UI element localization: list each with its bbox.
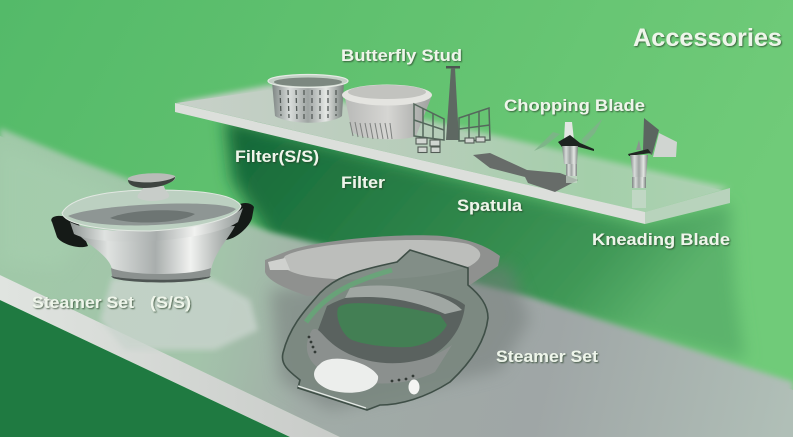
steamer reflection xyxy=(100,278,258,350)
label: Spatula: Spatula xyxy=(457,196,523,215)
shadow under upper shelf xyxy=(225,118,745,360)
label: Filter(S/S): Filter(S/S) xyxy=(235,147,319,166)
label: Steamer Set (S/S) xyxy=(32,293,191,312)
shelf front edge xyxy=(175,103,645,224)
lid knob xyxy=(128,173,175,201)
icon: kneading blade xyxy=(628,118,677,208)
panel: lower counter surface xyxy=(0,128,793,437)
label: Butterfly Stud: Butterfly Stud xyxy=(341,46,462,65)
label: Steamer Set (S/S): (S/S) xyxy=(150,293,191,312)
shadow around steamer on counter xyxy=(270,265,530,410)
label: Steamer Set (S/S): Steamer Set xyxy=(32,293,134,312)
steamer tray xyxy=(265,235,500,296)
icon: stainless steel steamer set xyxy=(51,173,258,350)
label: Kneading Blade: Kneading Blade xyxy=(592,230,730,249)
label: Chopping Blade: Chopping Blade xyxy=(504,96,645,115)
counter lower green front xyxy=(0,300,290,437)
title: Accessories xyxy=(633,24,782,52)
icon: filter basket xyxy=(342,84,432,139)
icon: stainless steel filter xyxy=(268,74,348,123)
panel: upper shelf xyxy=(175,85,730,224)
icon: spatula xyxy=(473,153,578,192)
label: Steamer Set: Steamer Set xyxy=(496,347,598,366)
icon: butterfly stud xyxy=(414,66,490,152)
label: Filter: Filter xyxy=(341,173,385,192)
icon: chopping blade xyxy=(534,118,603,183)
icon: plastic steamer set xyxy=(265,235,500,410)
steamer glass lid xyxy=(282,250,488,410)
counter front edge xyxy=(0,275,340,437)
